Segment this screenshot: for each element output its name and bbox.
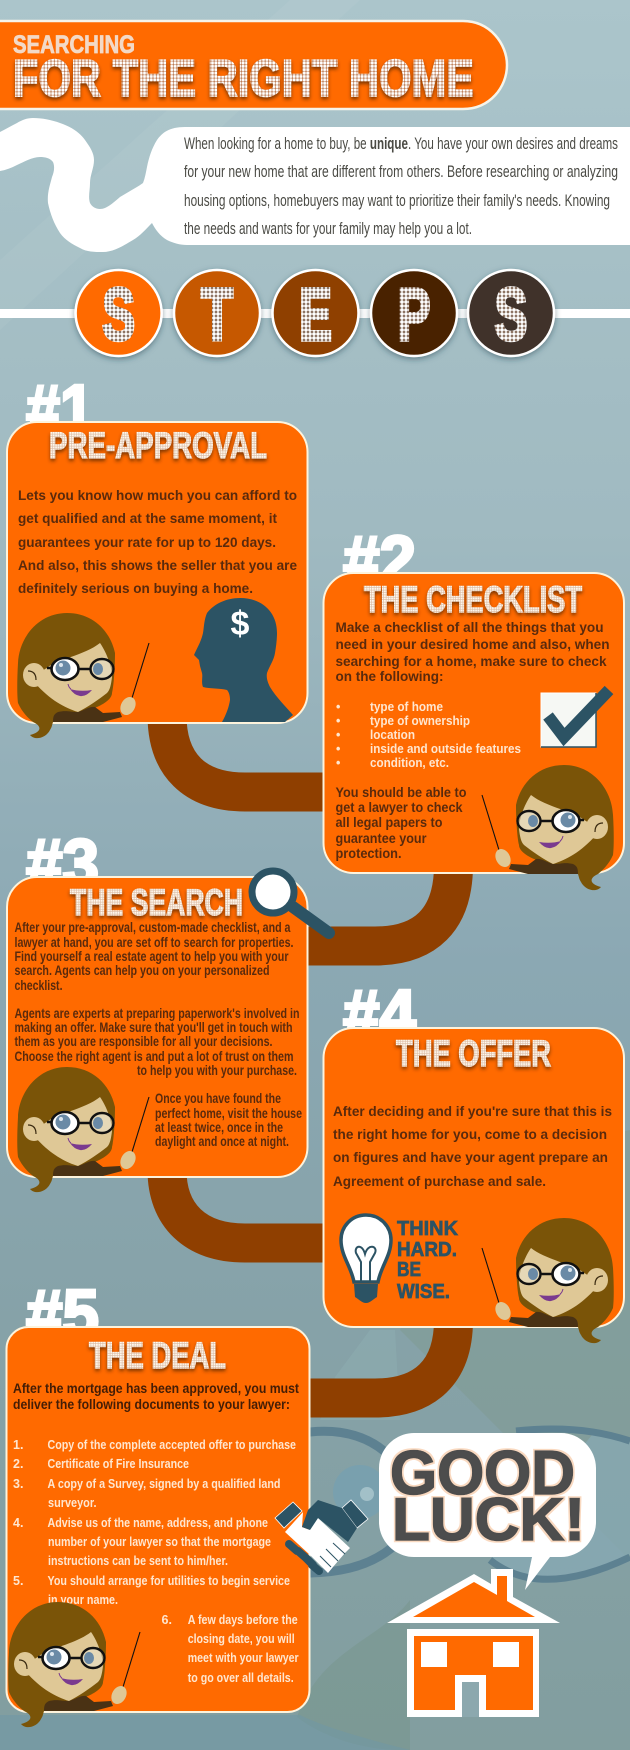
character: presenter girl bbox=[482, 765, 614, 890]
numbered document list: 4. bbox=[13, 1516, 23, 1530]
checklist bullets bbox=[336, 700, 521, 770]
think hard be wise: WISE. bbox=[397, 1281, 450, 1303]
think hard be wise: BE bbox=[397, 1259, 421, 1281]
intro panel with squiggle bbox=[0, 118, 630, 252]
body text: need in your desired home and also, when bbox=[336, 637, 610, 652]
heading: the search: THE SEARCH bbox=[70, 882, 243, 923]
body text: on figures and have your agent prepare an bbox=[333, 1150, 608, 1165]
checklist bullets: type of home bbox=[370, 700, 443, 714]
body text: Make a checklist of all the things that you bbox=[336, 620, 604, 635]
connector 3 to 4 bbox=[167, 1170, 330, 1243]
body text: lawyer: all legal papers to bbox=[336, 815, 442, 830]
panel: the search bbox=[7, 877, 308, 1192]
body text: lawyer at hand, you are set off to search for properties. bbox=[14, 935, 294, 950]
panel: the deal bbox=[6, 1327, 310, 1727]
panel: the offer bbox=[324, 1028, 624, 1343]
good: GOOD bbox=[390, 1439, 575, 1508]
title line: searching: SEARCHING bbox=[13, 31, 135, 59]
body text: visit twice: at least twice, once in the bbox=[155, 1120, 283, 1135]
body text bbox=[13, 1381, 299, 1412]
character: presenter girl bbox=[17, 613, 149, 738]
step circle S bbox=[76, 270, 162, 356]
heading: the offer: THE OFFER bbox=[396, 1033, 551, 1074]
body text: Choose the right agent is and put a lot of trust on them bbox=[14, 1049, 294, 1064]
icon: head with dollar bbox=[194, 598, 293, 722]
body text: visit twice bbox=[155, 1091, 302, 1149]
body text: lawyer: You should be able to bbox=[336, 785, 466, 800]
numbered document list bbox=[13, 1438, 299, 1685]
step circle S: S bbox=[102, 273, 135, 356]
numbered document list: A copy of a Survey, signed by a qualified land bbox=[48, 1477, 280, 1491]
connector 2 to 3 bbox=[300, 865, 454, 946]
body text: on the following: bbox=[336, 669, 444, 684]
heading: pre-approval: PRE-APPROVAL bbox=[49, 425, 267, 466]
think hard be wise: THINK bbox=[397, 1218, 459, 1240]
title line: for the right home: FOR THE RIGHT HOME bbox=[13, 50, 474, 108]
numbered document list: A few days before the bbox=[188, 1613, 298, 1627]
body text: visit twice: Once you have found the bbox=[155, 1091, 281, 1106]
title banner bbox=[0, 21, 507, 109]
body text: visit twice: perfect home, visit the house bbox=[155, 1106, 302, 1121]
numbered document list: 6. bbox=[162, 1613, 172, 1627]
step circle P bbox=[371, 270, 457, 356]
body text: Agreement of purchase and sale. bbox=[333, 1174, 546, 1189]
numbered document list: 1. bbox=[13, 1438, 23, 1452]
numbered document list: Advise us of the name, address, and phone bbox=[48, 1516, 268, 1530]
connector 1 to 2 bbox=[167, 715, 330, 792]
number 2: #2 bbox=[343, 522, 416, 598]
step circle E bbox=[272, 270, 358, 356]
body text: visit twice: daylight and once at night. bbox=[155, 1134, 289, 1149]
intro text: the needs and wants for your family may help you a lot. bbox=[184, 219, 472, 238]
step circle P: P bbox=[398, 273, 430, 356]
body text bbox=[336, 620, 610, 684]
numbered document list: 5. bbox=[13, 1574, 23, 1588]
numbered document list: Certificate of Fire Insurance bbox=[48, 1457, 189, 1471]
heading: the deal: THE DEAL bbox=[89, 1335, 226, 1376]
numbered document list: to go over all details. bbox=[188, 1671, 294, 1685]
number 5: #5 bbox=[26, 1276, 99, 1352]
body text: lawyer bbox=[336, 785, 466, 861]
checklist bullets: • bbox=[336, 700, 340, 714]
body text: checklist. bbox=[14, 978, 62, 993]
body text: searching for a home, make sure to check bbox=[336, 654, 607, 669]
number 3: #3 bbox=[26, 825, 99, 901]
checklist bullets: • bbox=[336, 742, 340, 756]
body text: lawyer: protection. bbox=[336, 846, 402, 861]
step circle S bbox=[468, 270, 554, 356]
step circle S: S bbox=[494, 273, 528, 356]
step circle T bbox=[174, 270, 260, 356]
numbered document list: 2. bbox=[13, 1457, 23, 1471]
numbered document list: meet with your lawyer bbox=[188, 1651, 299, 1665]
numbered document list: You should arrange for utilities to begin service bbox=[48, 1574, 290, 1588]
body text: After your pre-approval, custom-made checklist, and a bbox=[14, 920, 291, 935]
numbered document list: closing date, you will bbox=[188, 1632, 295, 1646]
numbered document list: 3. bbox=[13, 1477, 23, 1491]
body text: making an offer. Make sure that you'll get in touch with bbox=[14, 1020, 292, 1035]
body text: After deciding and if you're sure that this is bbox=[333, 1104, 612, 1119]
steps row bbox=[0, 270, 630, 356]
icon: magnifying glass bbox=[252, 871, 329, 933]
icon: checkbox bbox=[541, 690, 609, 747]
checklist bullets: type of ownership bbox=[370, 714, 470, 728]
body text: the right home for you, come to a decision bbox=[333, 1127, 607, 1142]
number 4: #4 bbox=[343, 976, 416, 1052]
body text bbox=[18, 488, 297, 596]
checklist bullets: inside and outside features bbox=[370, 742, 521, 756]
body text bbox=[333, 1104, 612, 1189]
body text: get qualified and at the same moment, it bbox=[18, 511, 278, 526]
body text: search. Agents can help you on your personalized bbox=[14, 963, 270, 978]
checklist bullets: • bbox=[336, 714, 340, 728]
body text: definitely serious on buying a home. bbox=[18, 581, 253, 596]
character: presenter girl bbox=[17, 1067, 149, 1192]
panel: pre-approval bbox=[7, 422, 308, 738]
step circle E: E bbox=[299, 273, 332, 356]
body text: deliver the following documents to your lawyer: bbox=[13, 1397, 290, 1412]
connector 4 to 5 bbox=[300, 1320, 454, 1398]
intro text bbox=[184, 134, 618, 238]
panel: the checklist bbox=[324, 573, 624, 890]
checklist bullets: • bbox=[336, 756, 340, 770]
numbered document list: instructions can be sent to him/her. bbox=[48, 1554, 228, 1568]
body text: guarantees your rate for up to 120 days. bbox=[18, 535, 276, 550]
icon: house bbox=[387, 1569, 560, 1717]
checklist bullets: • bbox=[336, 728, 340, 742]
checklist bullets: condition, etc. bbox=[370, 756, 449, 770]
body text bbox=[14, 920, 300, 1078]
icon: head with dollar: $ bbox=[231, 605, 250, 643]
icon: handshake bbox=[275, 1500, 368, 1573]
numbered document list: in your name. bbox=[48, 1593, 118, 1607]
numbered document list: surveyor. bbox=[48, 1496, 96, 1510]
numbered document list: number of your lawyer so that the mortgage bbox=[48, 1535, 271, 1549]
icon: light bulb bbox=[341, 1215, 391, 1303]
luck: LUCK! bbox=[392, 1486, 585, 1553]
body text: Lets you know how much you can afford to bbox=[18, 488, 297, 503]
body text: to help you with your purchase. bbox=[137, 1063, 297, 1078]
body text: After the mortgage has been approved, you must bbox=[13, 1381, 299, 1396]
think hard be wise: HARD. bbox=[397, 1239, 457, 1261]
callout: good luck speech bubble bbox=[379, 1433, 596, 1590]
body text: Agents are experts at preparing paperwork's involved in bbox=[14, 1006, 300, 1021]
character: presenter girl bbox=[8, 1602, 140, 1727]
numbered document list: Copy of the complete accepted offer to purchase bbox=[48, 1438, 296, 1452]
body text: Find yourself a real estate agent to help you with your bbox=[14, 949, 289, 964]
body text: lawyer: get a lawyer to check bbox=[336, 800, 463, 815]
character: presenter girl bbox=[482, 1218, 614, 1343]
body text: And also, this shows the seller that you are bbox=[18, 558, 297, 573]
checklist bullets: location bbox=[370, 728, 415, 742]
body text: lawyer: guarantee your bbox=[336, 831, 427, 846]
think hard be wise bbox=[397, 1218, 459, 1303]
number 1: #1 bbox=[26, 371, 94, 447]
body text: them as you are responsible for all your decisions. bbox=[14, 1034, 272, 1049]
step circle T: T bbox=[201, 273, 233, 356]
